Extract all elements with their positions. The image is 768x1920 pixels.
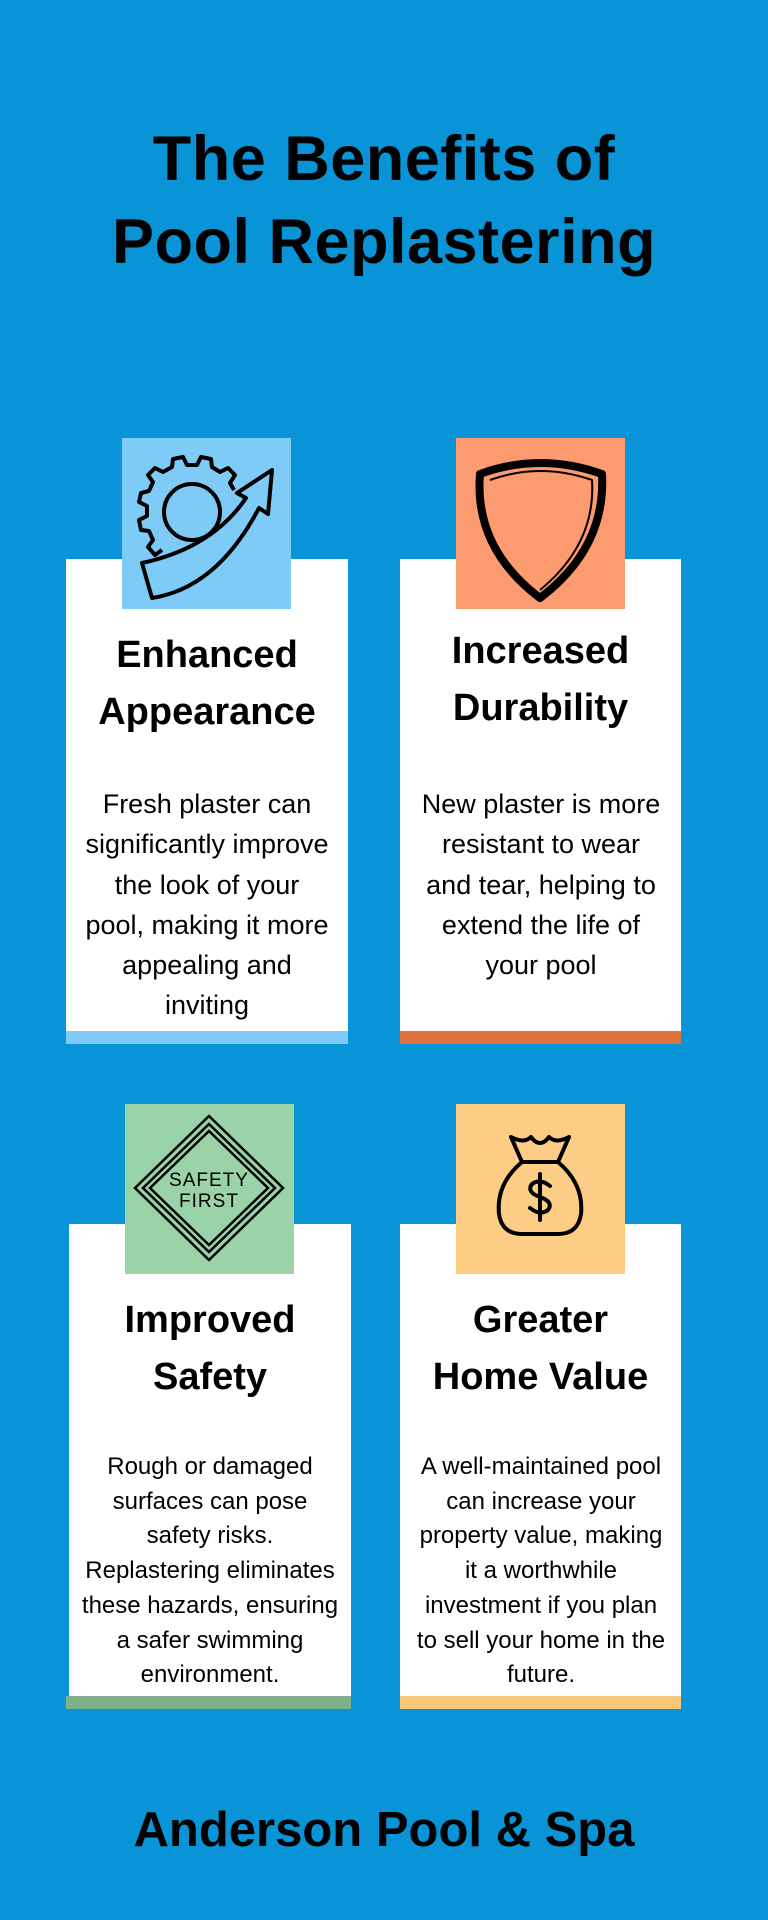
heading — [98, 634, 316, 733]
body text: to sell your home in the — [417, 1627, 665, 1654]
accent strip — [400, 1031, 681, 1044]
title: Pool Replastering — [112, 207, 656, 277]
body text: investment if you plan — [425, 1592, 657, 1619]
body text: pool, making it more — [85, 910, 329, 940]
icon: shield — [456, 438, 625, 609]
body text: A well-maintained pool — [421, 1453, 661, 1480]
icon: gear with arrow — [122, 438, 291, 609]
body text: can increase your — [446, 1488, 636, 1515]
body text: surfaces can pose — [113, 1488, 307, 1515]
accent strip — [66, 1031, 348, 1044]
heading: Home Value — [433, 1356, 648, 1398]
heading: Greater — [473, 1299, 608, 1341]
card body — [66, 559, 348, 1031]
body text — [422, 789, 660, 980]
body text: your pool — [485, 950, 597, 980]
body text — [417, 1453, 665, 1688]
icon: safety first sign: FIRST — [179, 1191, 239, 1212]
body text: inviting — [165, 990, 249, 1020]
body text: Rough or damaged — [107, 1453, 313, 1480]
heading: Improved — [124, 1299, 296, 1341]
card body — [400, 1224, 681, 1696]
heading: Safety — [153, 1356, 267, 1398]
body text: appealing and — [122, 950, 292, 980]
body text — [82, 1453, 338, 1688]
icon: money bag — [456, 1104, 625, 1274]
heading: Appearance — [98, 691, 316, 733]
accent strip — [400, 1696, 681, 1709]
title — [112, 124, 656, 277]
icon: safety first sign — [125, 1104, 294, 1274]
card body — [69, 1224, 351, 1696]
body text: property value, making — [420, 1522, 662, 1549]
heading: Enhanced — [116, 634, 298, 676]
footer: Anderson Pool & Spa — [134, 1803, 634, 1857]
panel: increased durability — [400, 438, 681, 1044]
body text: future. — [507, 1661, 575, 1688]
body text: safety risks. — [147, 1522, 273, 1549]
body text: it a worthwhile — [465, 1557, 617, 1584]
icon: safety first sign: SAFETY — [169, 1170, 249, 1191]
body text: Fresh plaster can — [103, 789, 311, 819]
panel: enhanced appearance — [66, 438, 348, 1044]
card body — [400, 559, 681, 1031]
heading: Durability — [453, 687, 628, 729]
body text: the look of your — [115, 870, 299, 900]
body text — [85, 789, 329, 1020]
heading — [452, 630, 629, 729]
accent strip — [66, 1696, 351, 1709]
body text: significantly improve — [85, 829, 329, 859]
body text: extend the life of — [442, 910, 640, 940]
body text: Replastering eliminates — [85, 1557, 335, 1584]
body text: environment. — [141, 1661, 279, 1688]
body text: a safer swimming — [117, 1627, 303, 1654]
heading: Increased — [452, 630, 629, 672]
panel: improved safety — [66, 1104, 351, 1709]
heading — [433, 1299, 648, 1398]
body text: resistant to wear — [442, 829, 640, 859]
panel: greater home value — [400, 1104, 681, 1709]
body text: New plaster is more — [422, 789, 660, 819]
heading — [124, 1299, 296, 1398]
title: The Benefits of — [153, 124, 615, 194]
body text: these hazards, ensuring — [82, 1592, 338, 1619]
body text: and tear, helping to — [426, 870, 656, 900]
